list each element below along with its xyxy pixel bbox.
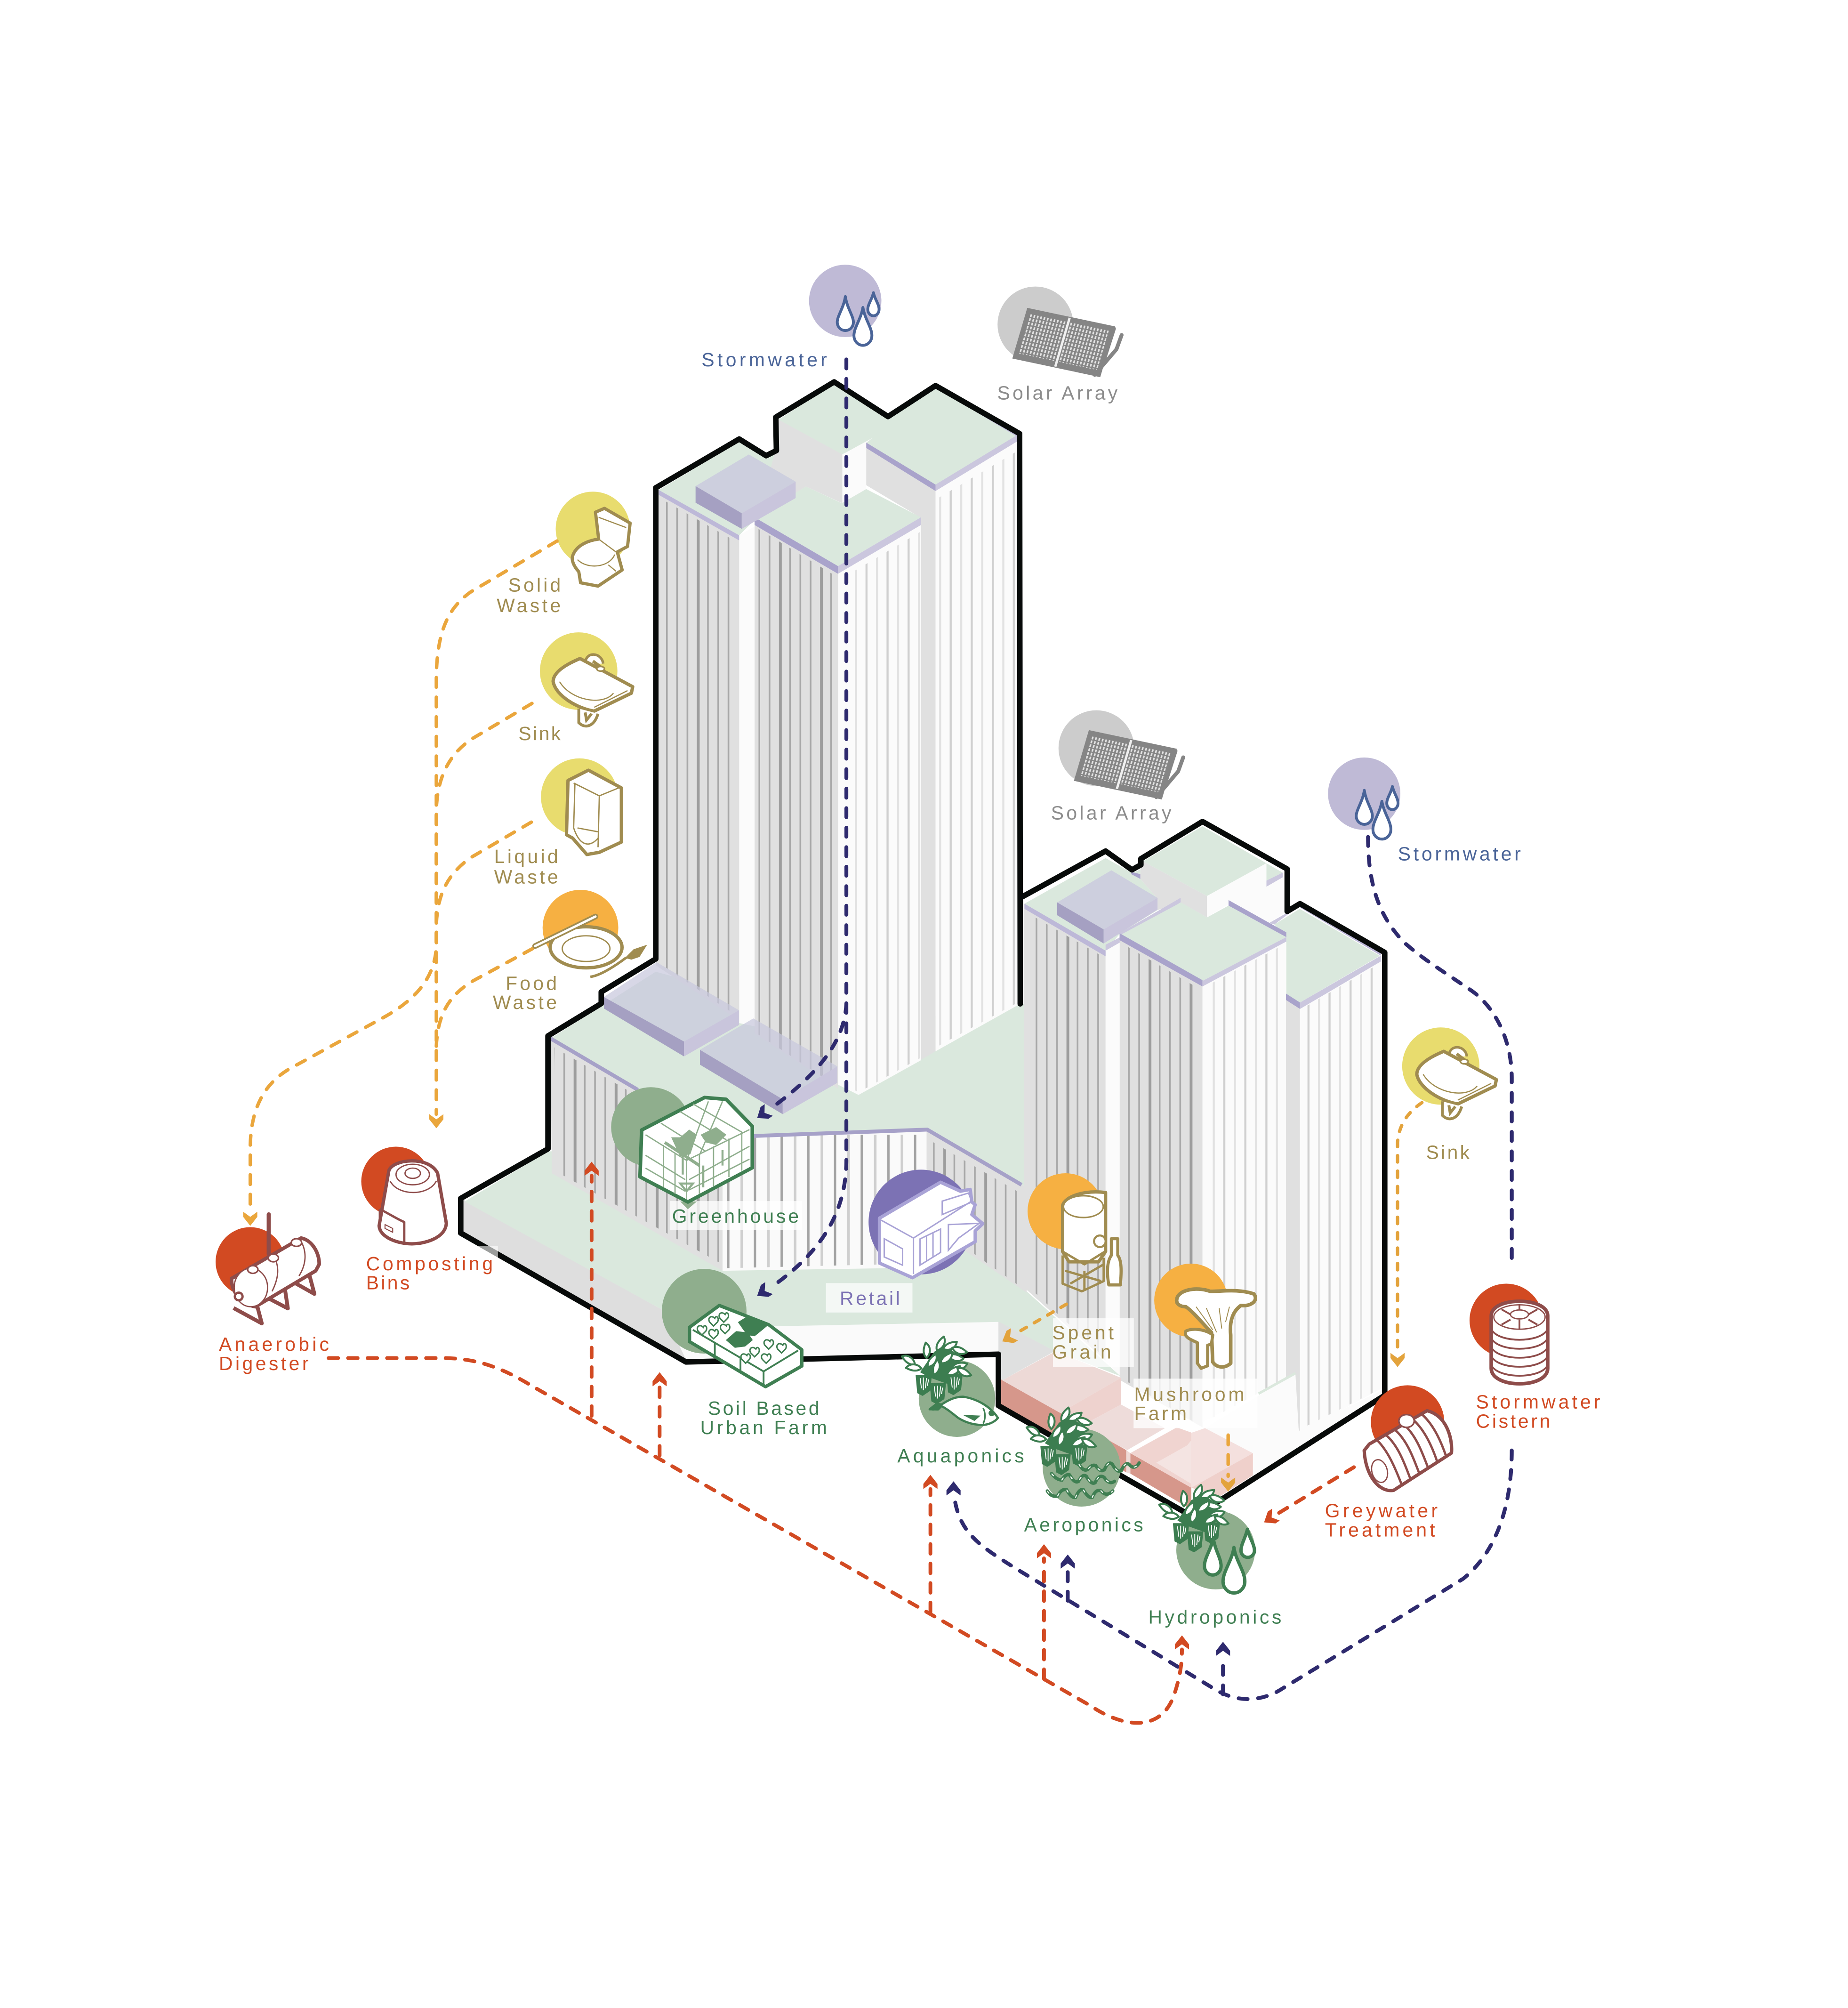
pink block 3 [1191, 1428, 1253, 1496]
arrow: red branch to aquaponics [924, 1475, 938, 1612]
arrow: cistern to hydroponics [1216, 1642, 1230, 1694]
lower podium front face [462, 1199, 686, 1359]
icon: retail shop [879, 1182, 983, 1278]
label: food waste: Food [506, 972, 557, 994]
label: soil based urban farm: Soil Based [708, 1397, 820, 1419]
label: stormwater top: Stormwater [701, 349, 827, 371]
arrow: right stormwater to cistern [1368, 837, 1512, 1260]
pink block 1 side [1066, 1378, 1121, 1425]
label: solid waste [497, 574, 561, 616]
rooftop box tower 2 [1057, 871, 1157, 944]
arrow: mushroom farm down [1221, 1435, 1235, 1492]
label: hydroponics: Hydroponics [1148, 1606, 1281, 1628]
building: podium and towers [461, 382, 1385, 1517]
icon: composting bin [379, 1161, 446, 1244]
icon: anaerobic digester [232, 1214, 319, 1323]
tower B right face [838, 523, 921, 1095]
circle: sink left [540, 632, 618, 710]
tower F right face [1300, 955, 1381, 1433]
arrow: right sink to greywater [1390, 1103, 1422, 1367]
arrow: liquid waste line [436, 822, 531, 976]
label: aeroponics: Aeroponics [1024, 1514, 1143, 1536]
label: sink right: Sink [1426, 1141, 1470, 1163]
icon: greywater tank [1364, 1411, 1452, 1491]
arrow: food waste line [436, 949, 532, 1046]
icon: greenhouse [640, 1097, 752, 1209]
tower D roof [1024, 858, 1157, 951]
icon: water drops right [1356, 787, 1398, 839]
label: greenhouse: Greenhouse [672, 1205, 799, 1227]
label: anaerobic digester: Anaerobic [219, 1333, 329, 1355]
icon: water drops top [837, 293, 879, 345]
tower 1 roof A [659, 442, 775, 535]
arrow: spent grain to mushroom [999, 1304, 1067, 1347]
label: solid waste: Waste [497, 595, 561, 616]
tower F roof [1274, 909, 1380, 1002]
circle: solar lower [1059, 710, 1134, 786]
circle: spent grain [1028, 1173, 1103, 1249]
circle: soil farm [662, 1269, 747, 1354]
label: liquid waste [494, 846, 558, 888]
icon: sink left [553, 654, 633, 726]
circle: sink right [1402, 1027, 1479, 1105]
label: soil based urban farm: Urban Farm [700, 1417, 827, 1438]
pink block 2 [1130, 1427, 1191, 1488]
mushroom farm pink side 2 [1130, 1453, 1191, 1509]
terrace wall centre [723, 1119, 926, 1271]
icon: mushrooms [1177, 1289, 1255, 1368]
tower F left face [1286, 993, 1300, 1433]
label: stormwater cistern [1476, 1391, 1600, 1432]
label: stormwater cistern: Stormwater [1476, 1391, 1600, 1413]
tower E right face [1203, 935, 1286, 1422]
white ground between towers and outline [1194, 1373, 1385, 1515]
label: solid waste: Solid [508, 574, 561, 596]
label: mushroom farm [1134, 1383, 1244, 1424]
tower 2 white slot [1207, 863, 1285, 923]
circle: solid waste [556, 492, 630, 566]
pink strip [1126, 1450, 1130, 1474]
label: sink left: Sink [518, 723, 561, 744]
circle: stormwater top [809, 265, 881, 337]
label: soil based urban farm [700, 1397, 827, 1438]
pink block 1 top [1002, 1351, 1126, 1450]
label: solar array lower: Solar Array [1051, 802, 1172, 824]
label: composting bins: Composting [366, 1253, 493, 1274]
arrow: sink to digester [243, 703, 532, 1226]
icon: toilet [572, 508, 630, 586]
circle: cistern [1470, 1283, 1543, 1357]
circle: food waste [543, 890, 619, 966]
label: food waste: Waste [493, 992, 557, 1013]
label: composting bins: Bins [366, 1272, 410, 1294]
icon: aeroponics plant and roots [1027, 1408, 1139, 1498]
tower E roof [1120, 903, 1286, 981]
circle: composting [361, 1147, 431, 1216]
icon: hydroponics plant and drops [1159, 1485, 1254, 1593]
circle: greywater [1371, 1385, 1444, 1459]
icon: aquaponics plant and fish [902, 1337, 998, 1425]
tower 2 rear roof [1143, 826, 1266, 896]
icon: plate and cutlery [535, 917, 645, 977]
label: liquid waste: Waste [494, 866, 558, 888]
tower C left face [866, 443, 936, 1060]
terrace lavender edge [551, 1039, 1021, 1185]
tower C roof [866, 387, 1019, 485]
circle: liquid waste [541, 758, 618, 835]
tower 1 rear roof [776, 384, 936, 454]
circle: hydroponics [1176, 1510, 1255, 1589]
icon: soil based planter [690, 1306, 802, 1387]
label: anaerobic digester: Digester [219, 1353, 308, 1374]
label backing panels [477, 1201, 1258, 1428]
circle: stormwater right [1328, 758, 1400, 830]
label: spent grain [1052, 1322, 1114, 1363]
lower terrace green [465, 1143, 1120, 1376]
label: food waste [493, 972, 557, 1013]
circle: digester [216, 1227, 285, 1297]
terrace wall right [926, 1131, 1027, 1293]
label: aquaponics: Aquaponics [897, 1445, 1024, 1467]
terrace planter 2 [700, 1018, 837, 1114]
arrow: stormwater to greenhouse [753, 359, 846, 1124]
black building outline [461, 382, 1385, 1517]
tower C right face [936, 436, 1020, 1051]
label: greywater treatment: Treatment [1325, 1519, 1435, 1541]
terrace planter 1 [604, 962, 739, 1056]
label: solar array top: Solar Array [997, 382, 1118, 404]
pink band [1083, 1404, 1165, 1450]
rooftop box tower 1 [696, 454, 795, 529]
tower E left face [1120, 933, 1203, 1427]
grey wedge beside band [998, 1321, 1055, 1380]
icon: urinal [566, 770, 621, 855]
label: greywater treatment: Greywater [1325, 1500, 1438, 1522]
white roof band [662, 1311, 999, 1359]
label: anaerobic digester [219, 1333, 329, 1374]
circle: aeroponics [1043, 1429, 1120, 1507]
tower 1 rear grey wall [739, 419, 843, 535]
tower A left face [656, 491, 739, 1021]
labels [219, 349, 1600, 1628]
label: retail: Retail [840, 1287, 900, 1309]
arrow: cistern to aeroponics [1061, 1555, 1075, 1601]
icon: solar panel lower [1075, 731, 1183, 798]
arrow: stormwater to soil farm [753, 1004, 846, 1302]
label: composting bins [366, 1253, 493, 1294]
arrow: red branch to lower wall [585, 1161, 599, 1416]
arrow: cistern to aquaponics [947, 1451, 1512, 1699]
icon: fermentation tank [1062, 1192, 1121, 1291]
arrow: solid waste to composting [429, 541, 557, 1129]
terrace wall stripes [554, 1048, 1021, 1288]
label: mushroom farm: Farm [1134, 1403, 1187, 1424]
arrow: red branch to aeroponics [1037, 1544, 1051, 1679]
label: stormwater cistern: Cistern [1476, 1410, 1550, 1432]
icon: solar panel top [1013, 309, 1122, 376]
arrow: digester main red line [329, 1358, 1189, 1723]
label: spent grain: Spent [1052, 1322, 1114, 1344]
tower D left face [1024, 903, 1106, 1361]
icon: sink right [1417, 1047, 1496, 1119]
terrace wall left [551, 1039, 723, 1271]
circle: mushroom [1154, 1264, 1228, 1337]
upper terrace green [551, 972, 1027, 1187]
arrow: greywater to farm [1260, 1467, 1354, 1528]
label: stormwater right: Stormwater [1398, 843, 1521, 865]
circle: retail [868, 1169, 973, 1274]
mushroom farm pink side 1 [998, 1377, 1126, 1472]
circle: greenhouse [611, 1087, 691, 1167]
arrow: red branch to soil farm [652, 1372, 667, 1456]
circle: solar top [997, 287, 1073, 362]
label: greywater treatment [1325, 1500, 1438, 1541]
label: liquid waste: Liquid [494, 846, 558, 867]
label: mushroom farm: Mushroom [1134, 1383, 1244, 1405]
lavender strip behind tower E [1120, 898, 1181, 940]
tower 1 slot [843, 422, 901, 503]
tower B left face [755, 520, 838, 1089]
tower 2 rear grey [1141, 861, 1207, 918]
label: spent grain: Grain [1052, 1341, 1111, 1363]
circle: aquaponics [919, 1360, 995, 1437]
icon: stormwater cistern [1491, 1301, 1548, 1384]
tower B roof [755, 486, 921, 566]
